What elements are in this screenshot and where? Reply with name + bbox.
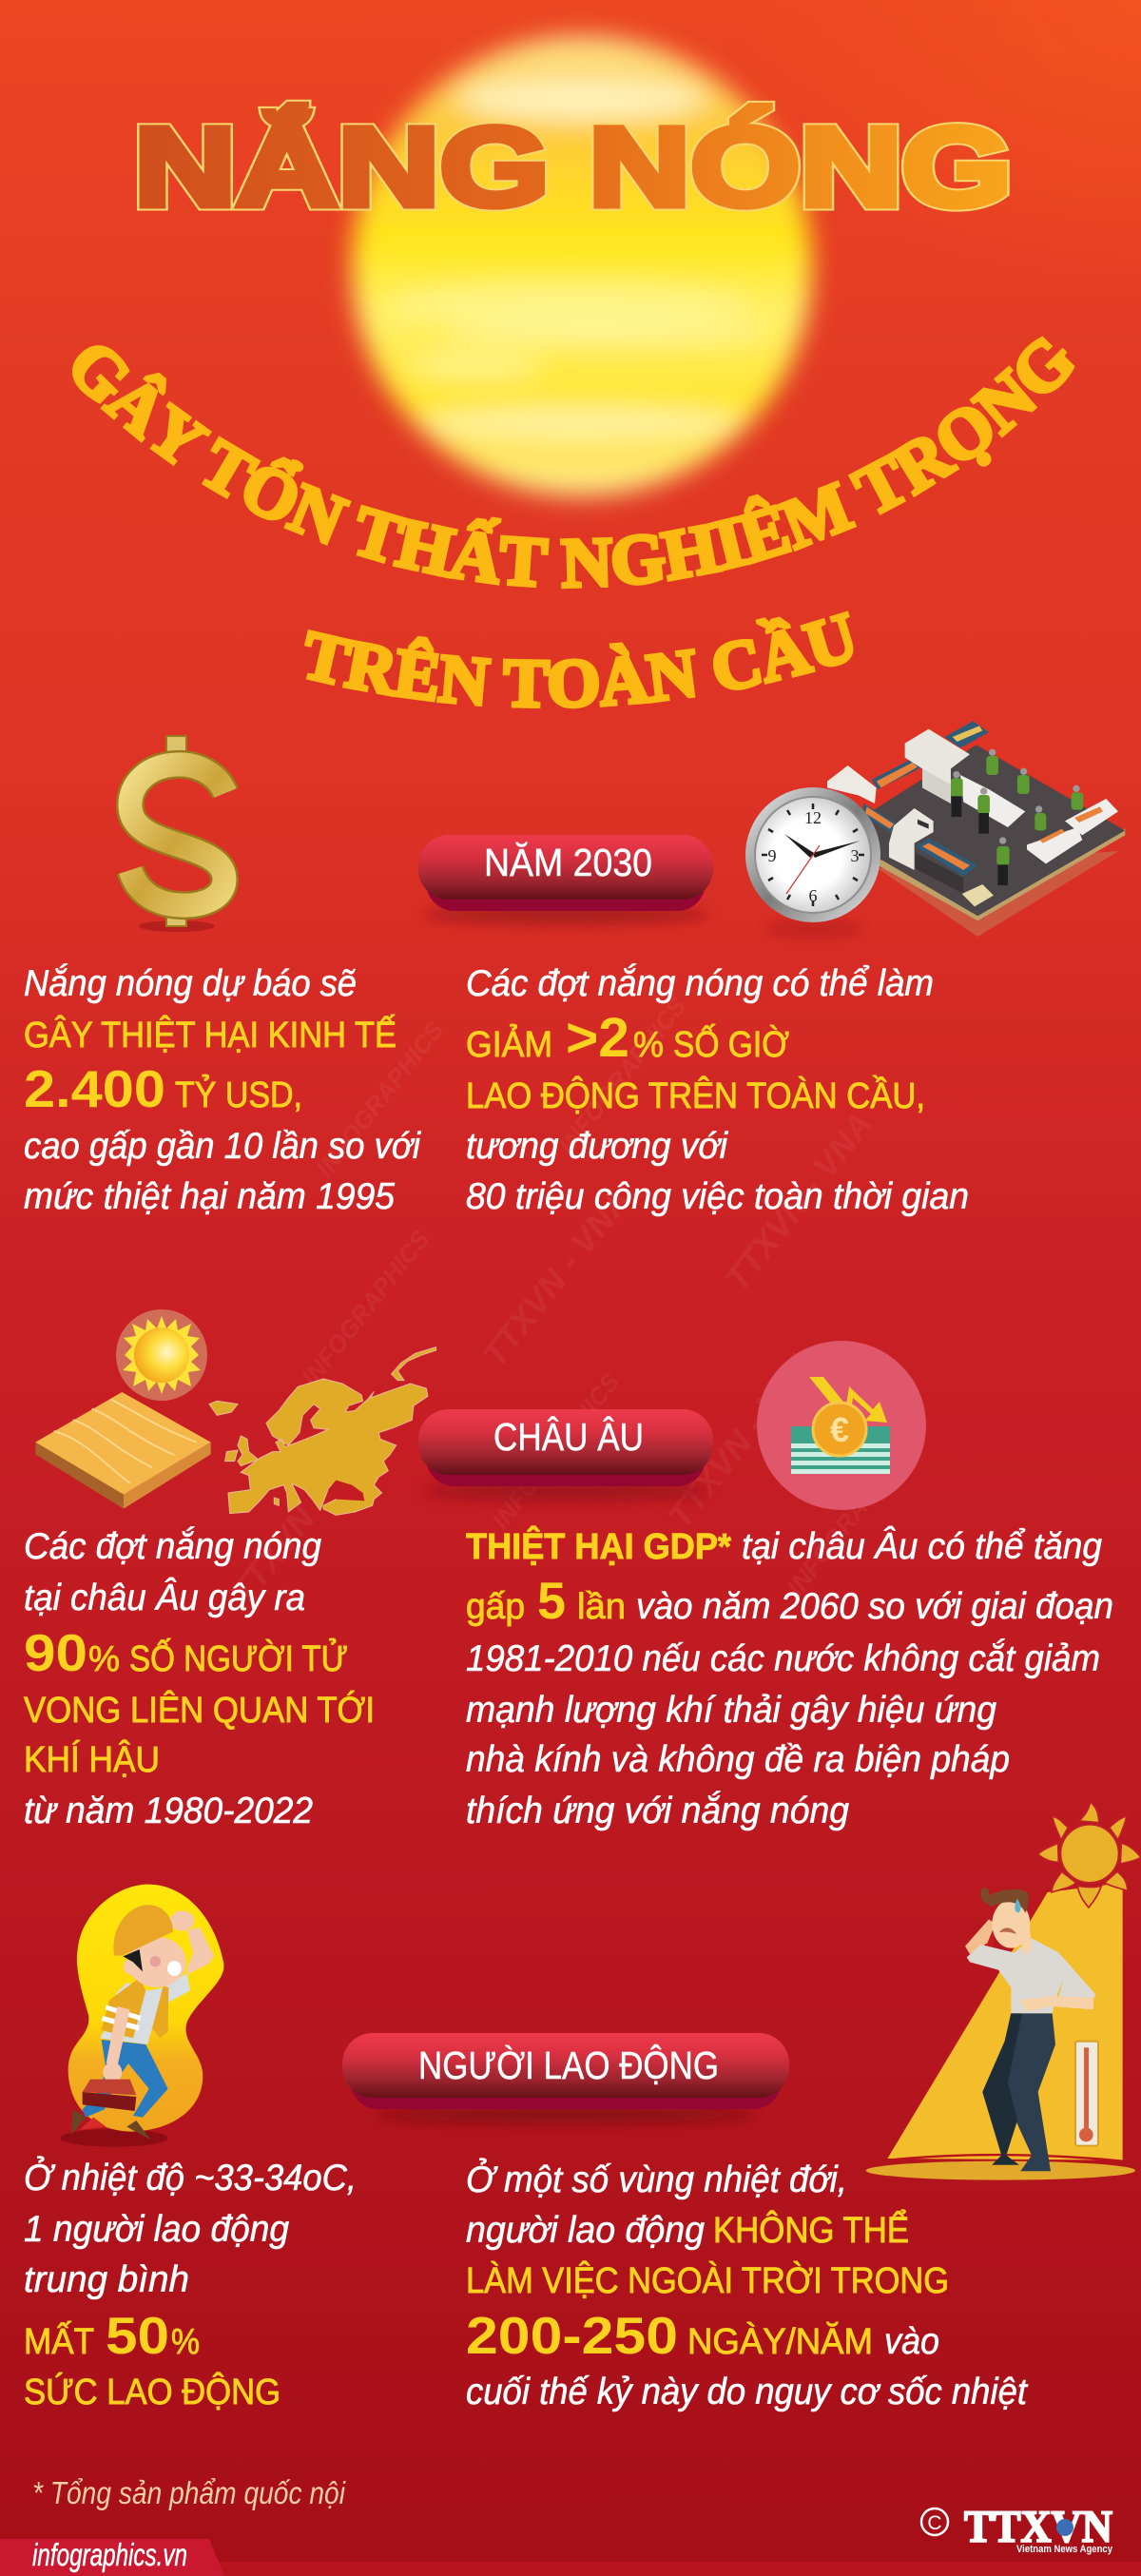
text block: working hours: >2 <box>566 1007 629 1069</box>
pill: châu Âu: CHÂU ÂU <box>493 1415 644 1459</box>
text block: deaths: tại châu Âu gây ra <box>24 1578 305 1618</box>
text block: working hours: 80 triệu công việc toàn thời gian <box>466 1176 969 1217</box>
text block: 50 percent labour loss: Ở nhiệt độ ~33-34oC, <box>24 2156 357 2198</box>
infographic canvas: INFOGRAPHICS <box>486 1367 626 1535</box>
pill: năm 2030: NĂM 2030 <box>484 841 652 884</box>
icon: wall clock: 9 <box>768 846 776 865</box>
footer bar: website: infographics.vn <box>32 2537 187 2572</box>
infographic canvas: INFOGRAPHICS <box>310 1016 450 1183</box>
text block: outdoor work days: cuối thế kỷ này do nguy cơ sốc nhiệt <box>466 2372 1029 2412</box>
icon: sun in circle <box>116 1309 207 1401</box>
subtitle arc: GÂY TỔN THẤT NGHIÊM TRỌNG: GÂY TỔN THẤT NGHIÊM TRỌNG <box>72 337 1075 590</box>
subtitle arc: TRÊN TOÀN CẦU: TRÊN TOÀN CẦU <box>304 610 854 709</box>
icon: map of Europe <box>209 1347 436 1515</box>
text block: GDP damage: mạnh lượng khí thải gây hiệu ứng <box>466 1690 996 1731</box>
logo: TTXVN copyright: TTXVN <box>964 2502 1112 2552</box>
icon: gold dollar sign <box>130 736 225 932</box>
text block: working hours: tương đương với <box>466 1126 728 1167</box>
text block: outdoor work days: 200-250 <box>466 2306 678 2365</box>
text block: outdoor work days: vào <box>884 2321 939 2362</box>
text block: deaths: VONG LIÊN QUAN TỚI <box>24 1690 375 1731</box>
icon: dry sand block <box>35 1392 211 1509</box>
text block: outdoor work days: KHÔNG THỂ <box>713 2208 909 2251</box>
text block: working hours: Các đợt nắng nóng có thể làm <box>466 963 934 1004</box>
text block: outdoor work days: người lao động <box>466 2210 705 2251</box>
text block: deaths: 90 <box>24 1623 87 1682</box>
infographic canvas: TTXVN - VNA <box>474 1181 637 1374</box>
text block: 50 percent labour loss: 1 người lao động <box>24 2209 289 2250</box>
text block: GDP damage: 1981-2010 nếu các nước không cắt giảm <box>466 1638 1100 1679</box>
text block: working hours <box>466 963 969 1217</box>
text block: economic damage <box>24 963 421 1217</box>
text block: outdoor work days <box>466 2158 1029 2412</box>
text block: 50 percent labour loss: 50 <box>106 2306 169 2365</box>
text block: economic damage: TỶ USD, <box>175 1074 302 1115</box>
icon: euro coin, money stack and falling arrow: € <box>830 1410 849 1449</box>
text block: 50 percent labour loss: trung bình <box>24 2259 189 2300</box>
pill: người lao động <box>342 2033 789 2123</box>
infographic canvas: INFOGRAPHICS <box>781 1434 920 1601</box>
section: năm 2030 <box>24 721 1125 1217</box>
text block: working hours: % <box>633 1025 664 1065</box>
text block: deaths: từ năm 1980-2022 <box>24 1791 313 1831</box>
text block: economic damage: mức thiệt hại năm 1995 <box>24 1176 395 1217</box>
text block: deaths: KHÍ HẬU <box>24 1739 160 1780</box>
title: NẮNG NÓNG: NẮNG NÓNG <box>134 104 1012 230</box>
icon: man suffering in sun beam with thermometer <box>866 1802 1141 2180</box>
text block: outdoor work days: LÀM VIỆC NGOÀI TRỜI TRONG <box>466 2260 949 2301</box>
text block: GDP damage: lần <box>577 1587 626 1627</box>
text block: economic damage: 2.400 <box>24 1059 165 1118</box>
text block: 50 percent labour loss: SỨC LAO ĐỘNG <box>24 2371 280 2412</box>
pill: người lao động: NGƯỜI LAO ĐỘNG <box>418 2043 719 2087</box>
text block: GDP damage <box>466 1525 1113 1831</box>
infographic canvas: TTXVN - VNA <box>717 1105 880 1298</box>
infographic canvas: TTXVN - VNA <box>222 1419 385 1612</box>
icon: euro coin, money stack and falling arrow <box>757 1341 926 1510</box>
icon: wall clock: 3 <box>850 846 860 865</box>
text block: economic damage: cao gấp gần 10 lần so với <box>24 1126 421 1167</box>
text block: economic damage: GÂY THIỆT HẠI KINH TẾ <box>24 1014 396 1056</box>
text block: outdoor work days: NGÀY/NĂM <box>687 2321 873 2362</box>
text block: 50 percent labour loss: % <box>171 2322 200 2362</box>
pill: năm 2030 <box>418 835 713 923</box>
text block: 50 percent labour loss: MẤT <box>24 2320 94 2362</box>
text block: outdoor work days: Ở một số vùng nhiệt đới, <box>466 2158 847 2200</box>
footnote: * Tổng sản phẩm quốc nội <box>32 2475 346 2510</box>
icon: factory production line <box>827 721 1125 937</box>
infographic canvas: INFOGRAPHICS <box>552 992 692 1159</box>
text block: deaths: Các đợt nắng nóng <box>24 1526 321 1567</box>
text block: GDP damage: THIỆT HẠI GDP* <box>466 1525 731 1567</box>
text block: GDP damage: vào năm 2060 so với giai đoạn <box>636 1586 1113 1627</box>
text block: deaths: % <box>88 1639 120 1679</box>
logo: TTXVN copyright: Vietnam News Agency <box>1016 2544 1113 2555</box>
footer bar: website <box>0 2537 1141 2576</box>
icon: wall clock <box>745 787 880 936</box>
text block: deaths <box>24 1526 375 1831</box>
sun <box>352 36 812 496</box>
section: châu Âu <box>24 1309 1113 1831</box>
title: NẮNG NÓNG: NẮNG NÓNG <box>134 104 1012 230</box>
logo: TTXVN copyright: C <box>927 2512 942 2534</box>
icon: overheated construction worker <box>60 1885 223 2147</box>
section: người lao động <box>24 1802 1141 2412</box>
text block: working hours: LAO ĐỘNG TRÊN TOÀN CẦU, <box>466 1075 925 1116</box>
pill: châu Âu <box>418 1409 713 1500</box>
text block: GDP damage: gấp <box>466 1587 525 1627</box>
text block: GDP damage: tại châu Âu có thể tăng <box>742 1526 1102 1567</box>
text block: economic damage: Nắng nóng dự báo sẽ <box>24 963 357 1004</box>
text block: 50 percent labour loss <box>24 2156 357 2412</box>
icon: wall clock: 12 <box>804 808 822 827</box>
text block: GDP damage: 5 <box>537 1571 566 1630</box>
icon: wall clock: 6 <box>808 886 818 905</box>
text block: deaths: SỐ NGƯỜI TỬ <box>129 1637 348 1679</box>
logo: TTXVN copyright <box>921 2502 1113 2555</box>
text block: working hours: GIẢM <box>466 1023 552 1065</box>
text block: GDP damage: nhà kính và không đề ra biện pháp <box>466 1739 1010 1780</box>
text block: GDP damage: thích ứng với nắng nóng <box>466 1791 849 1831</box>
infographic canvas: TTXVN - VNA <box>660 1343 822 1536</box>
infographic canvas: INFOGRAPHICS <box>296 1225 435 1392</box>
text block: working hours: SỐ GIỜ <box>673 1022 789 1065</box>
